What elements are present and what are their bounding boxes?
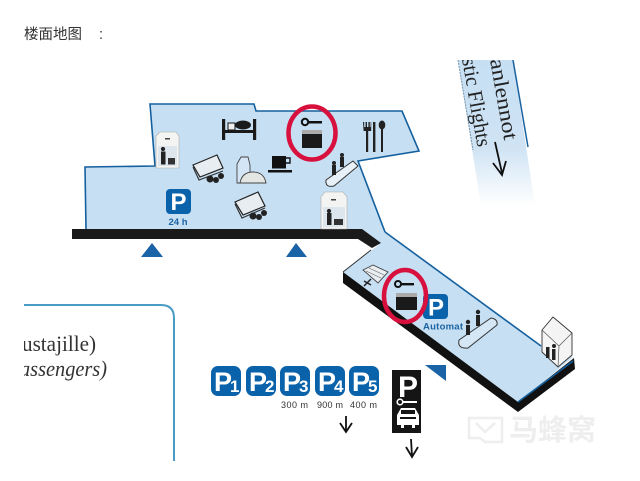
badge: P2 [246,366,276,397]
badge: P4 [315,366,345,397]
icon: parking 24h: P [170,189,187,216]
arrow: corridor direction [493,142,506,175]
badge: P5 [349,366,379,397]
title: : [99,27,103,43]
sign: car rental parking [392,370,421,433]
distance: 300 m: 300 m [281,400,308,410]
icon: milk and bread shop [237,157,266,183]
black wall: upper floor front [72,229,381,248]
badge: P5: P [352,367,370,397]
icon: cutlery [363,120,385,152]
badge: P2: P [249,367,267,397]
icon: coffee cup [268,156,292,172]
distance: 400 m: 400 m [350,400,377,410]
panel: terminal outline box [20,305,174,461]
highlight: red circle upper [288,106,336,160]
line: lower floor edge [343,250,371,272]
icon: ticket and plane [363,265,388,286]
icon: currency exchange upper [193,155,224,183]
triangle: entrance 3 [425,365,446,381]
arrow: to P4 [340,416,352,432]
lower floor front wall [343,272,575,412]
icon: key and luggage storage lower [395,281,417,310]
arrow: to car rental [406,439,418,457]
badge: P4: P [318,367,336,397]
label: Automat: Automat [423,322,464,332]
badge: P1 [211,366,241,397]
watermark: 马蜂窝 [509,414,596,447]
triangle: entrance 1 [141,243,163,257]
icon: parking automat [423,294,464,332]
icon: elevator upper right [321,192,347,229]
label: 24 h: 24 h [168,217,188,228]
icon: currency exchange lower [235,192,267,220]
badge: P3: P [283,367,301,397]
badge: P3: 3 [299,377,308,396]
triangle: entrance 2 [286,243,307,257]
icon: escalator lower [459,310,497,348]
badge: P2: 2 [265,377,274,396]
icon: parking 24h [166,189,191,228]
watermark [469,414,596,447]
panel: upper terminal floor [85,104,419,246]
label: ustajille: ustajille) [22,331,96,356]
sign: car rental parking: P [398,371,418,404]
corridor label: anlennot: anlennot [485,57,523,142]
panel: lower terminal floor [343,232,575,412]
distance: 900 m: 900 m [317,400,343,410]
corridor label: stic Flights: stic Flights [457,56,496,149]
icon: key and luggage storage [302,119,322,148]
icon: elevator lower [542,317,572,367]
badge: P4: 4 [334,377,344,396]
icon: elevator upper left [156,132,179,168]
badge: P1: 1 [230,377,239,396]
icon: bed [222,119,256,140]
label: passengers: assengers) [20,356,107,381]
icon: escalator upper [326,153,358,186]
badge: P1: P [214,367,232,397]
title: 楼面地图 [24,27,82,43]
parking badges [211,366,379,397]
highlight: red circle lower [384,270,426,322]
badge: P5: 5 [368,377,377,396]
icon: parking automat: P [428,294,444,322]
badge: P3 [280,366,310,397]
panel: domestic flights corridor [458,60,533,196]
